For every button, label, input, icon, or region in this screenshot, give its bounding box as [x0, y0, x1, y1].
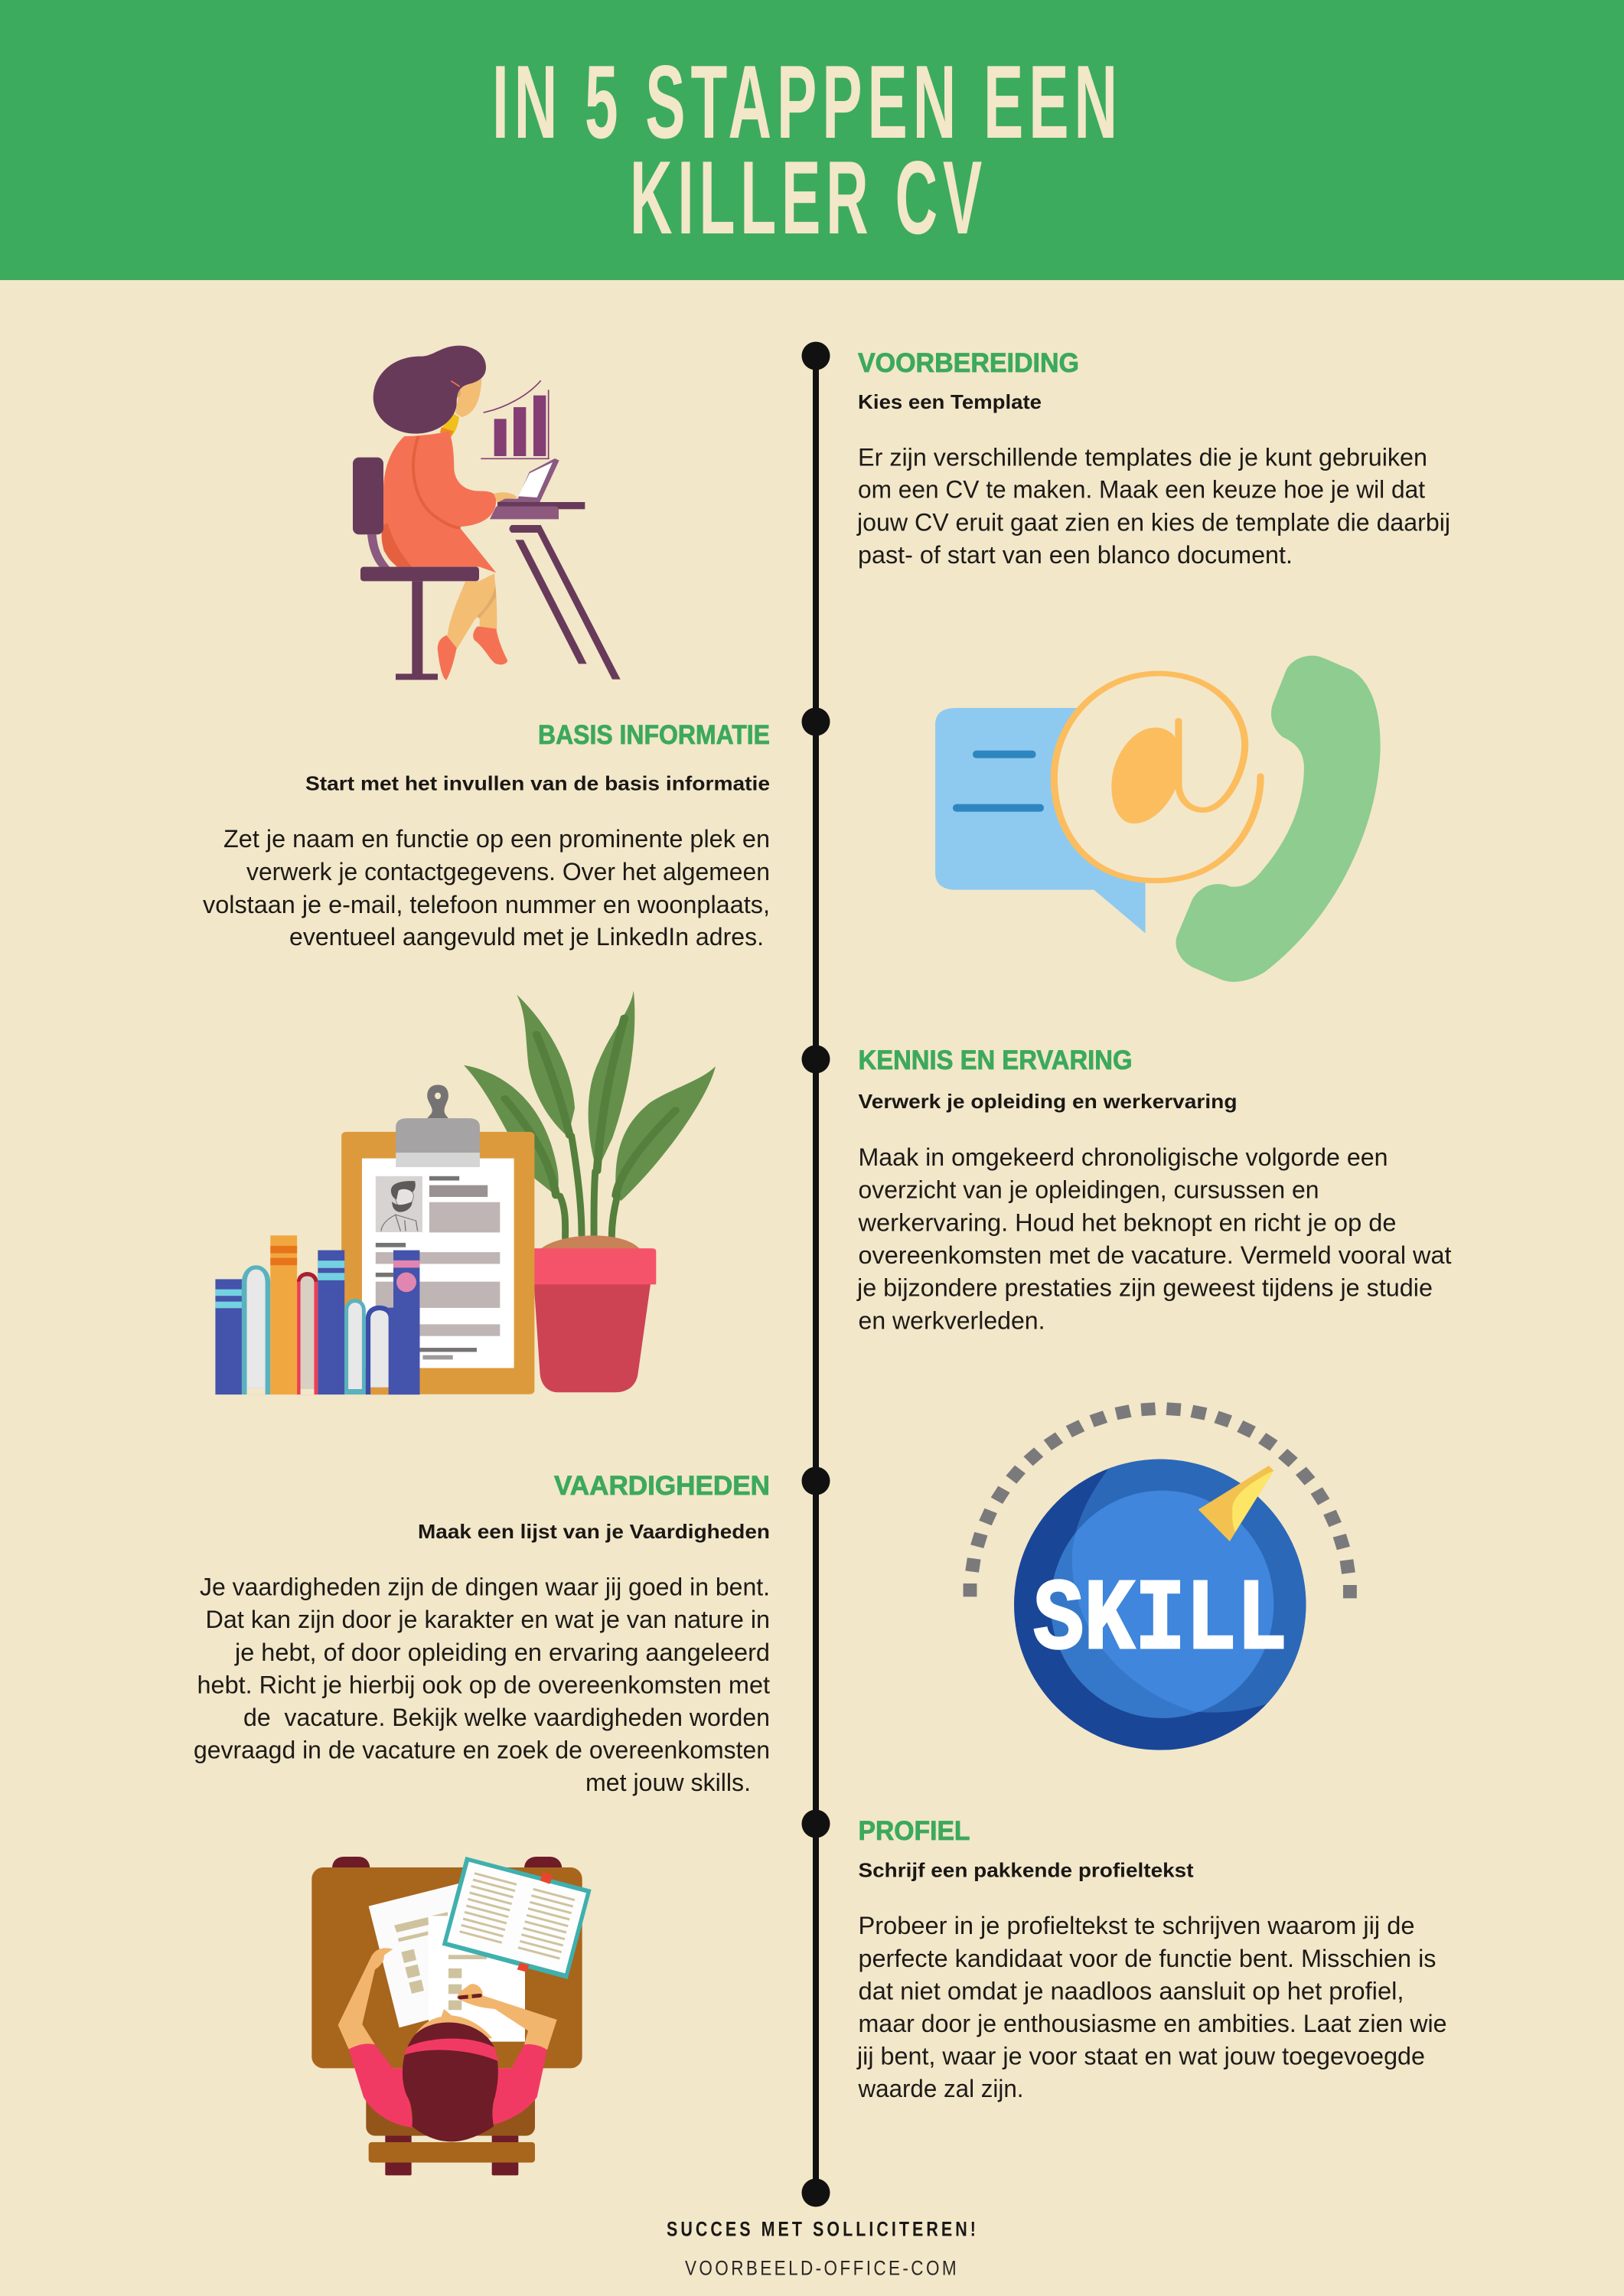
- body text: voorbereiding: [856, 444, 1450, 569]
- panel: vaardigheden: [194, 1471, 770, 1796]
- footer: closing message: SUCCES MET SOLLICITEREN!: [667, 2218, 979, 2241]
- body text: kennis en ervaring: werkervaring. Houd het beknopt en richt je op de: [857, 1209, 1396, 1237]
- body text: kennis en ervaring: [856, 1143, 1452, 1335]
- person: [338, 1948, 557, 2141]
- body text: kennis en ervaring: overeenkomsten met de vacature. Vermeld vooral wat: [859, 1241, 1452, 1269]
- clipboard with CV: [341, 1084, 534, 1394]
- heading: vaardigheden: VAARDIGHEDEN: [554, 1471, 770, 1501]
- timeline: [802, 341, 830, 2207]
- body text: vaardigheden: [194, 1574, 770, 1796]
- panel: profiel: [856, 1816, 1446, 2102]
- title: [492, 44, 1123, 256]
- subheading: kies een template: Kies een Template: [858, 390, 1042, 413]
- heading: voorbereiding: VOORBEREIDING: [858, 348, 1079, 378]
- body text: profiel: jij bent, waar je voor staat en wat jouw toegevoegde: [856, 2042, 1425, 2069]
- footer: [667, 2218, 979, 2279]
- heading: basis informatie: BASIS INFORMATIE: [538, 720, 770, 750]
- body text: voorbereiding: past- of start van een blanco document.: [858, 541, 1293, 569]
- body text: basis informatie: eventueel aangevuld met je LinkedIn adres.: [289, 923, 764, 951]
- body text: vaardigheden: Dat kan zijn door je karakter en wat je van nature in: [205, 1606, 770, 1633]
- papers: [369, 1883, 525, 2042]
- header band: [0, 0, 1624, 280]
- title: KILLER CV: [630, 139, 987, 256]
- body text: kennis en ervaring: je bijzondere prestaties zijn geweest tijdens je studie: [856, 1274, 1433, 1301]
- books: [215, 1235, 419, 1394]
- body text: profiel: [856, 1912, 1446, 2102]
- heading: profiel: PROFIEL: [859, 1816, 970, 1846]
- body text: kennis en ervaring: overzicht van je opleidingen, cursussen en: [859, 1176, 1319, 1203]
- dial ticks: [964, 1402, 1357, 1598]
- body text: vaardigheden: Je vaardigheden zijn de dingen waar jij goed in bent.: [200, 1574, 770, 1601]
- subheading: schrijf een pakkende profieltekst: Schrijf een pakkende profieltekst: [859, 1858, 1194, 1881]
- body text: vaardigheden: met jouw skills.: [585, 1769, 751, 1796]
- panel: basis informatie: [203, 720, 770, 951]
- illustration: skill dial: [964, 1402, 1357, 1750]
- body text: basis informatie: Zet je naam en functie op een prominente plek en: [223, 825, 770, 853]
- plant: [464, 990, 716, 1392]
- panel: voorbereiding: [856, 348, 1450, 569]
- heading: kennis en ervaring: KENNIS EN ERVARING: [859, 1045, 1133, 1075]
- body text: basis informatie: verwerk je contactgegevens. Over het algemeen: [246, 858, 770, 885]
- icon: at sign: [1054, 673, 1260, 881]
- footer: website: VOORBEELD-OFFICE-COM: [685, 2256, 959, 2279]
- illustration: contact icons: [935, 656, 1381, 982]
- body text: vaardigheden: gevraagd in de vacature en zoek de overeenkomsten: [194, 1736, 770, 1763]
- body text: kennis en ervaring: Maak in omgekeerd chronoligische volgorde een: [859, 1143, 1388, 1171]
- body text: profiel: Probeer in je profieltekst te schrijven waarom jij de: [859, 1912, 1414, 1939]
- icon: phone: [1176, 656, 1381, 982]
- body text: vaardigheden: je hebt, of door opleiding en ervaring aangeleerd: [234, 1639, 770, 1666]
- illustration: woman at desk: [353, 346, 621, 680]
- body text: kennis en ervaring: en werkverleden.: [859, 1307, 1045, 1335]
- body text: profiel: dat niet omdat je naadloos aansluit op het profiel,: [859, 1978, 1404, 2005]
- skill label: SKILL: [1033, 1564, 1287, 1678]
- body text: voorbereiding: jouw CV eruit gaat zien en kies de template die daarbij: [856, 508, 1450, 536]
- dial needle: [1198, 1466, 1273, 1541]
- illustration: clipboard, plant and books: [215, 990, 716, 1394]
- body text: voorbereiding: Er zijn verschillende templates die je kunt gebruiken: [858, 444, 1427, 471]
- body text: profiel: perfecte kandidaat voor de functie bent. Misschien is: [859, 1945, 1436, 1972]
- body text: profiel: maar door je enthousiasme en ambities. Laat zien wie: [859, 2010, 1446, 2037]
- illustration: person studying at desk: [311, 1857, 592, 2175]
- body text: voorbereiding: om een CV te maken. Maak een keuze hoe je wil dat: [858, 476, 1425, 504]
- body text: vaardigheden: hebt. Richt je hierbij ook op de overeenkomsten met: [197, 1671, 770, 1699]
- body text: basis informatie: volstaan je e-mail, telefoon nummer en woonplaats,: [203, 891, 770, 918]
- icon: speech bubble: [935, 708, 1146, 933]
- open book: [442, 1857, 592, 1979]
- subheading: maak een lijst: Maak een lijst van je Vaardigheden: [418, 1520, 770, 1543]
- subheading: verwerk je opleiding: Verwerk je opleiding en werkervaring: [859, 1090, 1237, 1113]
- panel: kennis en ervaring: [856, 1045, 1452, 1335]
- body text: vaardigheden: de vacature. Bekijk welke vaardigheden worden: [243, 1704, 770, 1731]
- subheading: start met het invullen: Start met het invullen van de basis informatie: [305, 771, 770, 794]
- body text: profiel: waarde zal zijn.: [858, 2075, 1024, 2102]
- dial disc: [1014, 1447, 1318, 1750]
- title: IN 5 STAPPEN EEN: [492, 44, 1123, 160]
- body text: basis informatie: [203, 825, 770, 951]
